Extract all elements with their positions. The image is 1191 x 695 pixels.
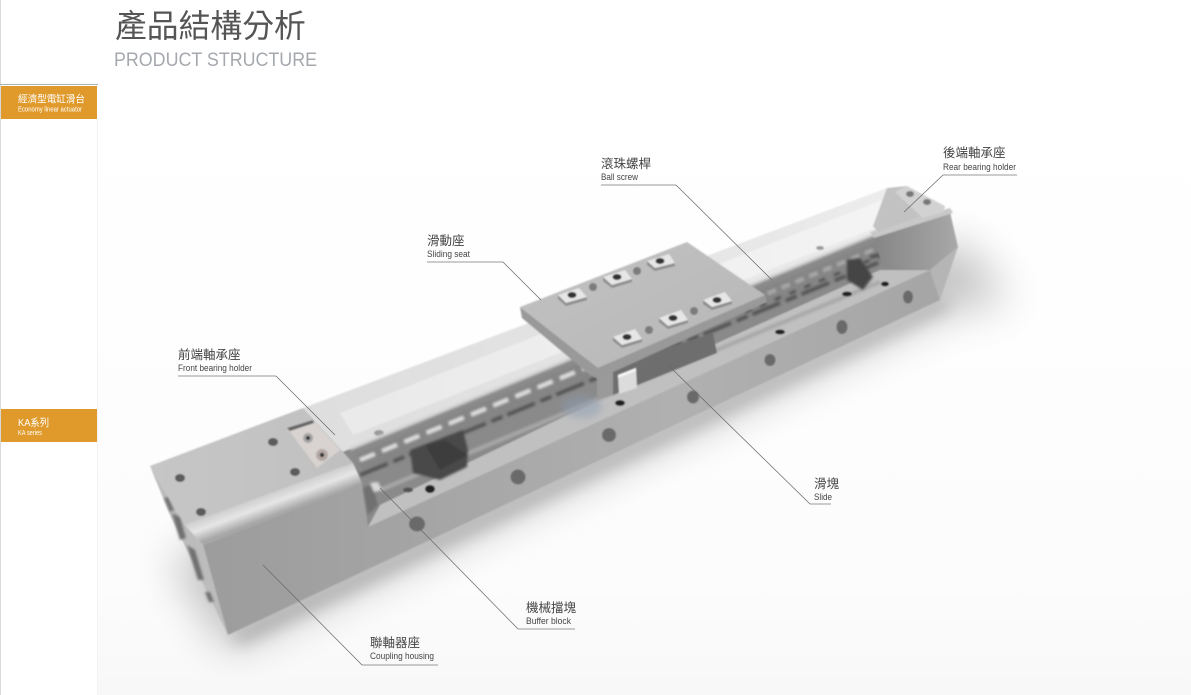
label: coupling housing [263, 565, 438, 665]
rear housing [870, 208, 958, 300]
label: buffer block [380, 488, 577, 629]
label: front bearing holder [178, 347, 335, 435]
rear bearing holder [873, 186, 945, 232]
label: rear bearing holder: Rear bearing holder [943, 162, 1016, 172]
label: coupling housing: Coupling housing [370, 651, 434, 661]
small holes [589, 267, 698, 334]
subtitle: PRODUCT STRUCTURE [114, 49, 317, 71]
sidebar: 經濟型電缸滑台 [18, 92, 85, 106]
top face bolts [175, 438, 300, 516]
background [98, 120, 1191, 695]
sliding seat [520, 242, 767, 379]
label: front bearing holder: 前端軸承座 [178, 347, 241, 362]
mounting pads [558, 254, 732, 348]
top cover [303, 188, 887, 453]
label: ball screw [601, 156, 772, 280]
label: sliding seat [427, 233, 541, 300]
label: coupling housing: 聯軸器座 [370, 635, 420, 650]
floor holes [403, 282, 889, 493]
label: rear bearing holder [904, 145, 1017, 212]
sidebar: Economy linear actuator [18, 106, 83, 114]
actuator illustration [150, 186, 958, 635]
sidebar [0, 0, 98, 695]
ball screw [350, 232, 880, 490]
label: sliding seat: Sliding seat [427, 249, 470, 259]
front block end face [150, 466, 228, 635]
label: buffer block: Buffer block [526, 616, 571, 626]
sidebar: KA系列 [18, 416, 49, 429]
front cut-out detail [363, 482, 382, 515]
label: buffer block: 機械擋塊 [526, 600, 577, 615]
rail top surface [368, 270, 932, 527]
title: 產品結構分析 [115, 8, 306, 44]
channel floor [340, 232, 932, 527]
front block top face [150, 408, 353, 525]
front block bevel [185, 463, 362, 545]
front bearing holder [287, 420, 340, 468]
label: front bearing holder: Front bearing holder [178, 363, 252, 373]
slide block [597, 333, 717, 400]
label: slide [668, 365, 840, 504]
sidebar: KA series [18, 430, 42, 437]
label: sliding seat: 滑動座 [427, 233, 465, 248]
label: rear bearing holder: 後端軸承座 [943, 145, 1006, 160]
blue reflection [562, 396, 602, 418]
label: slide: Slide [814, 492, 832, 502]
buffer block front [410, 430, 468, 480]
label: ball screw: 滾珠螺桿 [601, 156, 651, 171]
label: slide: 滑塊 [814, 476, 840, 491]
drop shadow [170, 240, 1010, 650]
label: ball screw: Ball screw [601, 172, 638, 182]
buffer block rear [847, 252, 893, 290]
side rail and front block face [203, 270, 940, 635]
